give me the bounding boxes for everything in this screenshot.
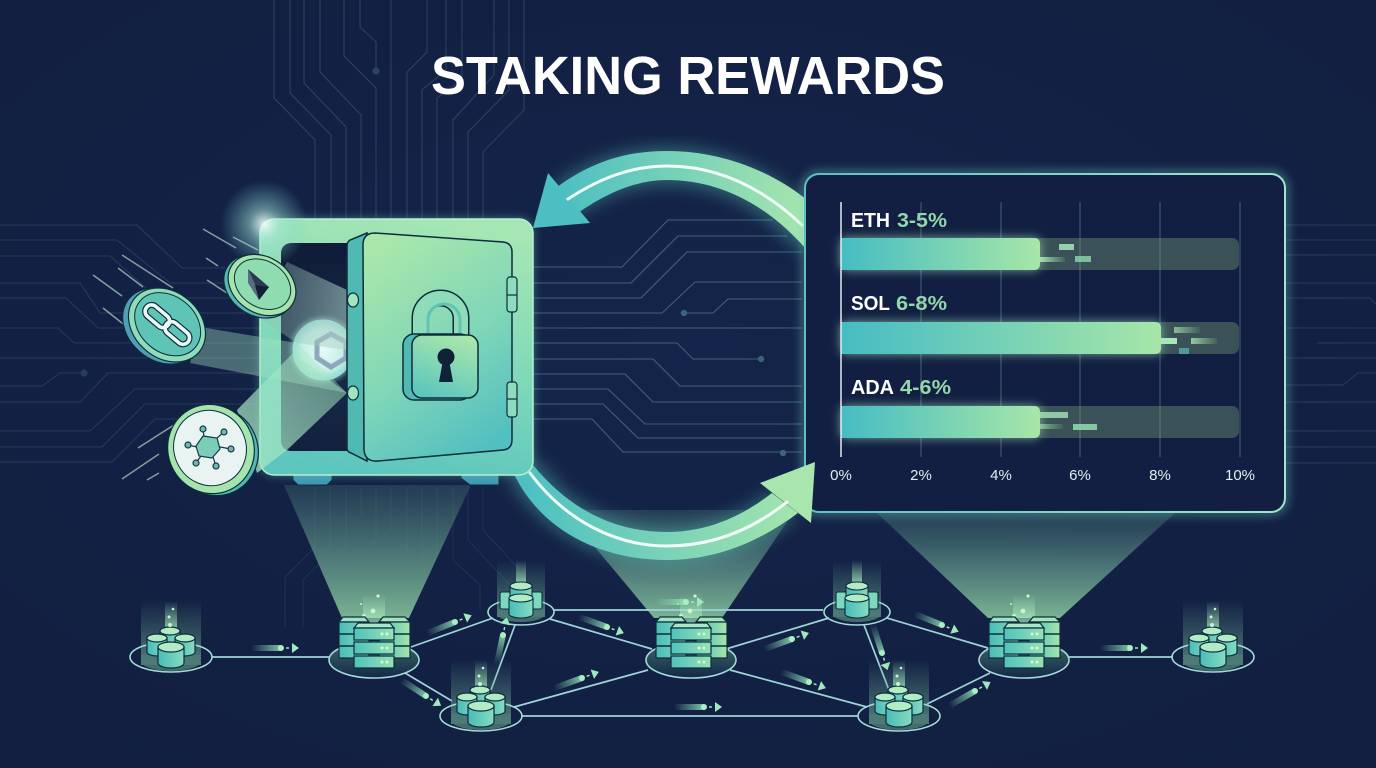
title: STAKING REWARDS [431, 46, 945, 106]
icon: chain coin [107, 270, 220, 381]
circuit lines: top [274, 0, 524, 220]
bar: ETH [841, 238, 1040, 270]
door hinges [507, 277, 517, 417]
axis labels: 8% [1149, 467, 1171, 484]
label: ETH 3-5% [851, 210, 947, 232]
bar glow [841, 238, 1161, 438]
label: ADA 4-6%: 4-6% [900, 377, 951, 399]
node: lower storage left [440, 659, 522, 731]
node: server left [329, 594, 419, 678]
safe door edge [347, 233, 367, 461]
node: upper storage left [488, 560, 554, 625]
label: SOL 6-8% [851, 293, 947, 315]
node: lower storage right [858, 659, 940, 731]
axis labels: 10% [1225, 467, 1255, 484]
axis labels: 6% [1069, 467, 1091, 484]
node: server centre [646, 594, 736, 678]
node: left storage [130, 600, 212, 672]
beam: panel to server [876, 512, 1176, 618]
node: upper storage right [824, 560, 890, 625]
bar: ADA [841, 406, 1040, 438]
safe feet [293, 475, 499, 485]
chart axis [840, 202, 842, 457]
label: SOL 6-8%: 6-8% [896, 293, 947, 315]
bar tracks [1030, 238, 1239, 438]
chart grid [921, 202, 1240, 457]
door bolts [348, 293, 358, 400]
label: SOL 6-8%: SOL [851, 293, 890, 315]
icon: padlock [403, 298, 478, 400]
beam: safe to server [284, 485, 471, 618]
node: server right [979, 594, 1069, 678]
inner coin [290, 317, 356, 383]
axis labels [830, 467, 1255, 484]
label: ADA 4-6%: ADA [851, 377, 894, 399]
arrow: rewards returning to safe [533, 151, 812, 256]
label: ETH 3-5%: ETH [851, 210, 890, 232]
bar motion dashes [1040, 244, 1217, 430]
corner flare [220, 180, 308, 268]
axis labels: 2% [910, 467, 932, 484]
node: right storage [1172, 600, 1254, 672]
icon: Ethereum coin [212, 240, 307, 331]
icon: safe vault [190, 180, 533, 485]
label: ETH 3-5%: 3-5% [897, 210, 947, 232]
safe opening [281, 243, 371, 451]
safe body [260, 219, 533, 475]
arrow: staked assets flowing to chart [513, 462, 815, 560]
light beams into safe [190, 262, 347, 473]
speed lines [93, 229, 258, 480]
circuit lines: right [1285, 225, 1376, 463]
panel: staking rewards chart [805, 174, 1285, 512]
circuit lines: below safe [285, 487, 520, 627]
safe door [363, 233, 512, 461]
axis labels: 4% [990, 467, 1012, 484]
axis labels: 0% [830, 467, 852, 484]
network nodes [130, 560, 1254, 731]
bar: SOL [841, 322, 1161, 354]
network links [212, 610, 1173, 716]
label: ADA 4-6% [851, 377, 951, 399]
circuit lines: left [0, 225, 262, 462]
circuit lines: centre [533, 220, 802, 456]
data flow arrows [251, 597, 1148, 712]
icon: network coin [153, 390, 273, 510]
beam: arc to server [564, 510, 795, 618]
